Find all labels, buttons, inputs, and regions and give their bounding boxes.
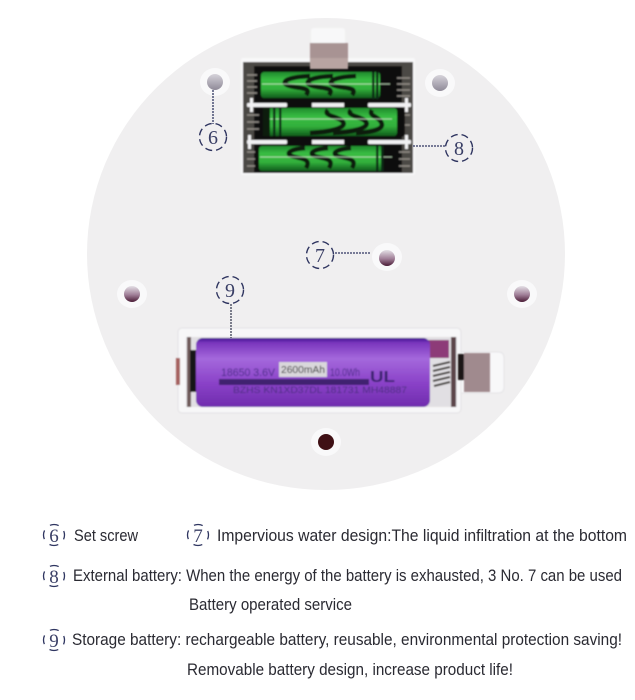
lithium cell: UL [370, 369, 395, 386]
battery dividers [247, 98, 411, 149]
screw hole: upper right [425, 69, 455, 97]
screw hole: left [117, 280, 147, 308]
lithium cell: 18650 3.6V [221, 367, 276, 379]
green battery 1 [259, 71, 393, 100]
legend: external battery: Battery operated service [189, 595, 352, 614]
panel: round device base [87, 18, 565, 490]
legend: external battery [44, 566, 622, 614]
green battery 2 [261, 107, 405, 137]
lithium cell: 2600mAh [281, 364, 325, 376]
screw hole: right [507, 280, 537, 308]
springs [247, 75, 410, 166]
callout 6: 6 [208, 127, 218, 149]
right tab slot [461, 352, 504, 393]
legend: set screw: 6 [49, 526, 59, 547]
callout 9 [216, 276, 244, 338]
lithium cell: 10.0Wh [330, 367, 360, 379]
screw hole: upper left [200, 68, 230, 96]
screw hole: bottom [311, 428, 341, 456]
lithium cell [196, 338, 430, 407]
panel: AAA battery compartment [241, 58, 415, 175]
callout 7: 7 [315, 245, 325, 267]
callout 8: 8 [454, 138, 464, 160]
legend: storage battery: 9 [49, 631, 59, 652]
panel: 18650 battery compartment [176, 328, 504, 413]
legend: impervious water design: 7 [193, 526, 203, 547]
callout 9: 9 [225, 280, 235, 302]
callout 7 [306, 242, 370, 268]
callout 8 [413, 134, 472, 162]
legend: external battery: 8 [49, 567, 59, 588]
release tab: bottom [458, 353, 490, 392]
lithium cell: BZHS KN1XD37DL 181731 MH48887 [233, 385, 407, 395]
legend: set screw [44, 524, 139, 547]
release tab: top [310, 28, 348, 69]
callout 6 [200, 90, 226, 150]
legend: set screw: Set screw [74, 526, 139, 545]
legend: storage battery [44, 630, 622, 679]
spring [433, 362, 450, 386]
drain hole: centre [372, 243, 402, 271]
legend: storage battery: Removable battery design, increase product life! [187, 660, 513, 679]
green battery 3 [257, 145, 397, 173]
